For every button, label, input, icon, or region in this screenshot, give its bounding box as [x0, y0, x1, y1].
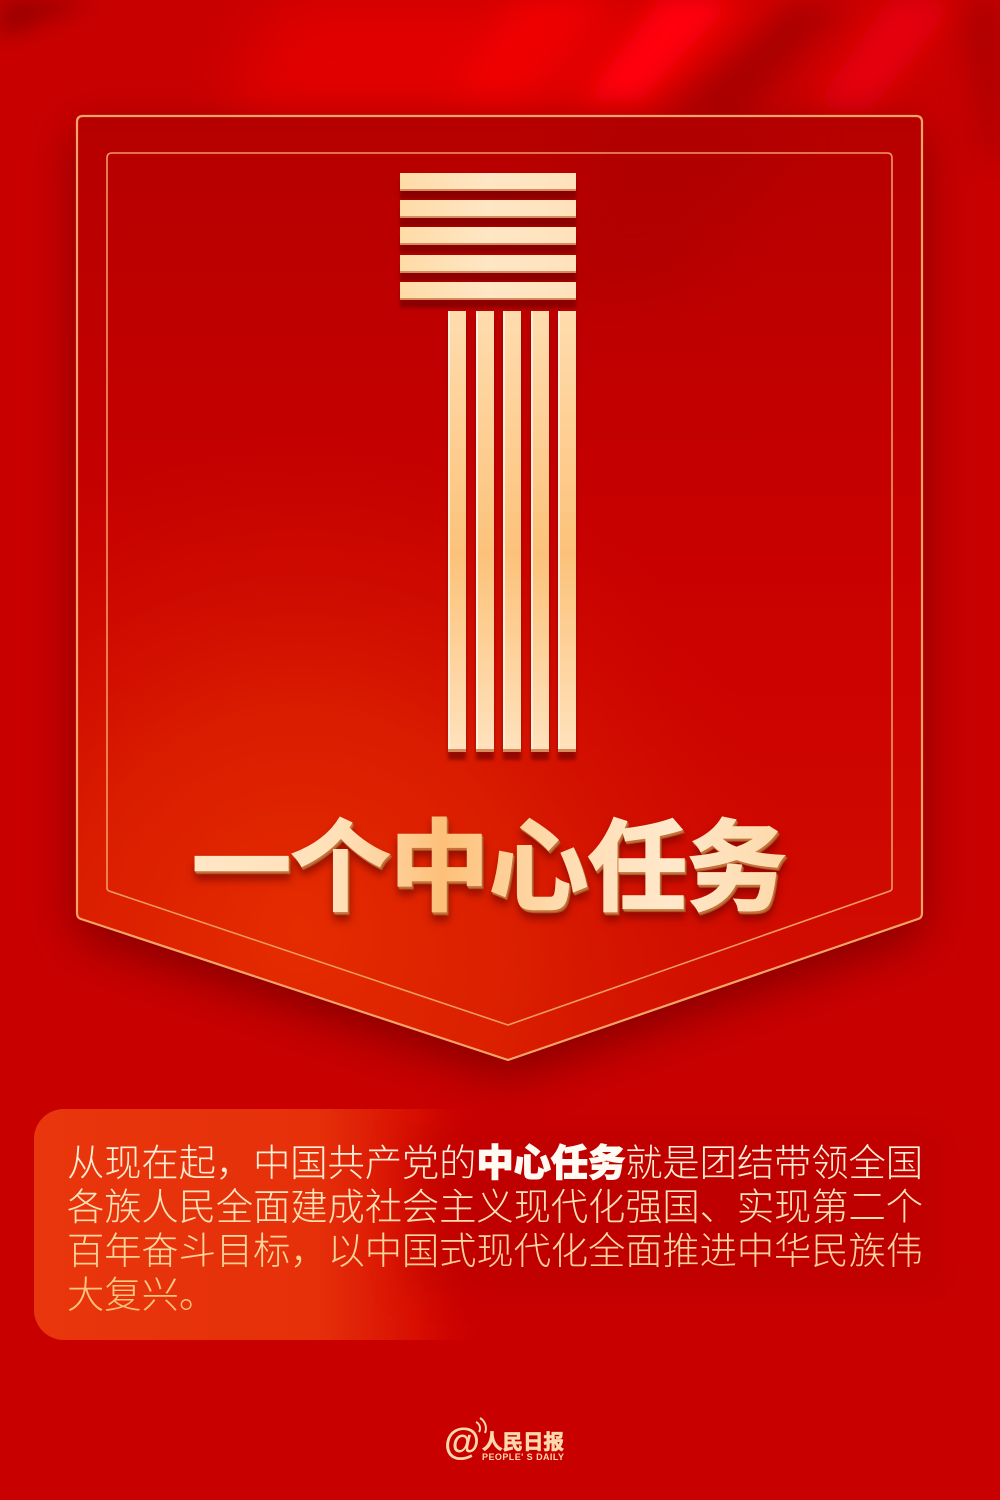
description text: 从现在起，中国共产党的中心任务就是团结带领全国 — [67, 1142, 923, 1184]
logo: People's Daily — [444, 1418, 564, 1462]
horizontal bars — [400, 173, 576, 300]
logo name: 人民日报 — [482, 1431, 564, 1454]
panel shadow — [77, 132, 922, 1076]
description text: 大复兴。 — [67, 1274, 216, 1316]
top ribbon folds — [0, 0, 1000, 160]
description text — [67, 1142, 923, 1316]
description text: 各族人民全面建成社会主义现代化强国、实现第二个 — [67, 1186, 923, 1228]
description card — [34, 1109, 1000, 1340]
outer gold border — [77, 116, 922, 1060]
icon: at sign with signal arcs: @ — [444, 1421, 480, 1462]
panel: shield banner — [77, 116, 922, 1060]
emblem: five horizontal bars over five vertical bars — [400, 173, 576, 752]
description text: 百年奋斗目标，以中国式现代化全面推进中华民族伟 — [67, 1230, 923, 1272]
soft shade behind text — [400, 1130, 945, 1290]
logo subtitle: PEOPLE' S DAILY — [482, 1452, 564, 1462]
title: 一个中心任务 — [192, 812, 786, 923]
vertical bars — [448, 311, 576, 752]
inner gold border — [107, 153, 892, 1025]
